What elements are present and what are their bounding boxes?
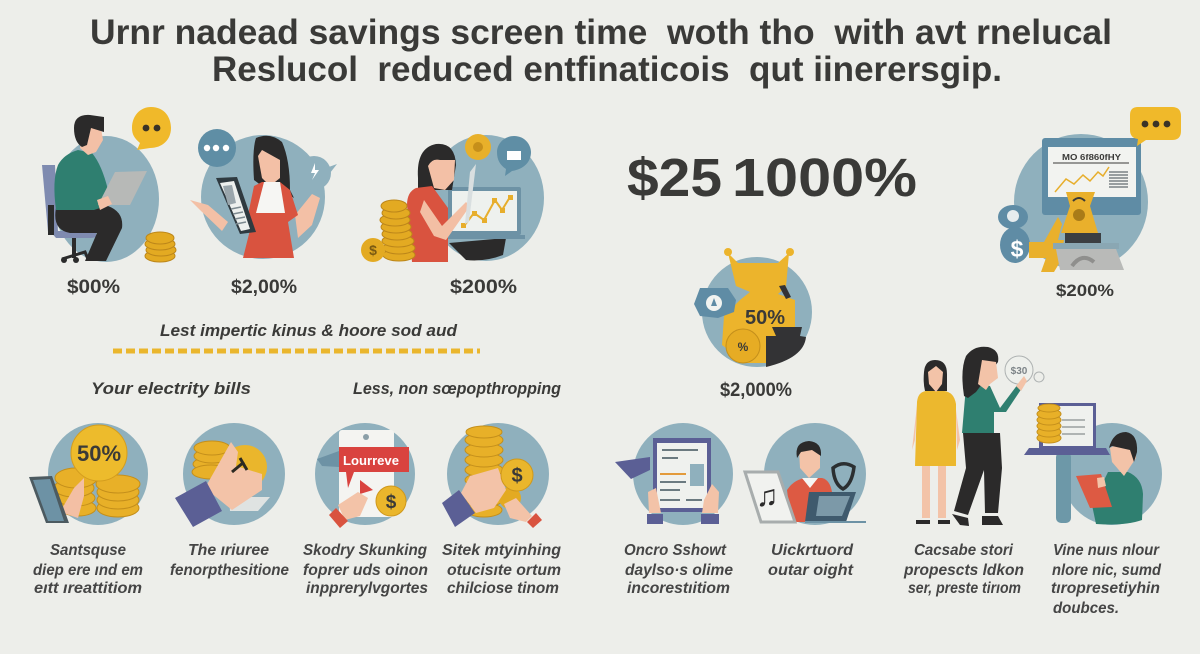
blue money bag: [998, 205, 1030, 263]
subheading with dashes: Lest impertic kinus & hoore sod aud: [160, 322, 458, 340]
caption: column 7: Cacsabe stori: [914, 542, 1014, 559]
caption: column 4: chilciose tinom: [447, 580, 559, 597]
caption: column 5: daylso·s olime: [625, 562, 733, 579]
info bubble: [694, 288, 736, 318]
coin: $: [369, 242, 377, 258]
yellow bag: [1061, 192, 1098, 233]
title: [90, 13, 1112, 89]
caption: column 7: propescts ldkon: [903, 562, 1024, 579]
headline figure: [627, 148, 917, 208]
caption: column 8: tıropresetiyhin: [1051, 580, 1160, 597]
caption: column 5: Oncro Sshowt: [624, 542, 727, 559]
label: second percentage: $2,00%: [231, 277, 297, 298]
music tablet: ♫: [756, 480, 778, 513]
shield: [833, 464, 854, 489]
caption: column 1: [33, 542, 143, 597]
dollar coin: $: [511, 465, 523, 487]
money circle: [1005, 356, 1044, 384]
blue bubble: [497, 136, 531, 176]
tablet: [216, 177, 256, 234]
caption: column 1: eıtt ıreattitiom: [34, 580, 142, 597]
caption: column 7: [903, 542, 1024, 597]
caption: column 8: [1051, 542, 1161, 617]
caption: column 4: [442, 542, 562, 597]
yellow speech bubble: [1130, 107, 1181, 146]
subheading: electricity: Your electrity bills: [91, 380, 251, 398]
icon: yellow bag with 50%: 50%: [745, 307, 785, 329]
caption: column 8: doubces.: [1053, 600, 1119, 617]
icon: woman with tablet: [190, 129, 337, 259]
caption: column 2: The ıriuree: [188, 542, 269, 559]
title: Urnr nadead savings screen time woth tho with avt rnelucal: [90, 13, 1112, 52]
speech bubble: yellow dots: [132, 107, 171, 150]
caption: column 6: outar oight: [768, 562, 854, 579]
label: bag amount: $2,000%: [720, 380, 792, 401]
caption: column 3: [303, 542, 428, 597]
caption: column 8: nlore nic, sumd: [1052, 562, 1161, 579]
figure: woman in teal with coin: [952, 347, 1044, 526]
red banner: Lourreve: [343, 453, 399, 468]
caption: column 1: diep ere ınd em: [33, 562, 143, 579]
coin: [361, 238, 385, 262]
coin stack: [1037, 404, 1061, 443]
caption: column 8: Vine nuıs nlour: [1053, 542, 1160, 559]
coin: %: [738, 340, 749, 354]
icon: coins 50%: [29, 423, 148, 525]
dollar coin: $: [386, 492, 397, 513]
caption: column 4: otucisıte ortum: [447, 562, 561, 579]
caption: column 3: inpprerylvgortes: [306, 580, 428, 597]
icon: phone with banner: [315, 423, 415, 528]
headline figure: 1000%: [732, 148, 917, 208]
label: first percentage: $00%: [67, 277, 120, 298]
coin stack: [380, 200, 415, 261]
label: monitor percentage: $200%: [1056, 281, 1114, 300]
caption: column 2: [170, 542, 289, 579]
icon: tablet with hands: [615, 423, 733, 525]
blue money bag: $: [1011, 236, 1024, 262]
icon: man on chair with laptop: [42, 107, 176, 263]
bubble: dots: [198, 129, 236, 167]
caption: column 5: [624, 542, 733, 597]
label: third percentage: $200%: [450, 277, 517, 298]
icon: monitor with money bag: [998, 107, 1181, 272]
bubble: bolt: [297, 156, 337, 190]
icon: woman with chart and coins: [361, 134, 544, 262]
title: Reslucol reduced entfinaticois qut iinerersgip.: [212, 50, 1002, 89]
monitor: MO 6f860fHY: [1062, 153, 1122, 162]
caption: column 2: fenorpthesitione: [170, 562, 289, 579]
monitor with chart: [448, 187, 525, 239]
caption: column 1: Santsquse: [50, 542, 126, 559]
caption: column 6: Uickrtuord: [771, 542, 854, 559]
figure: woman in yellow dress: [912, 360, 960, 524]
caption: column 3: Skodry Skunking: [303, 542, 428, 559]
caption: column 4: Sitek mtyinhing: [442, 542, 562, 559]
headline figure: $25: [627, 148, 722, 208]
icon: yellow bag with 50%: [694, 248, 812, 367]
caption: column 3: foprer uds oinon: [303, 562, 428, 579]
money circle: $30: [1011, 366, 1028, 377]
icon: person with music and laptop: [745, 423, 866, 525]
icon: coins 50%: 50%: [77, 441, 121, 466]
gray device: [1053, 243, 1124, 270]
icon: hand with coins: [175, 423, 285, 527]
icon: hands with coin stack: [442, 423, 549, 528]
caption: column 5: incorestıitiom: [627, 580, 730, 597]
caption: column 6: [768, 542, 854, 579]
icon: person at table with laptop: [1024, 403, 1162, 525]
subheading: shopping: Less, non sœpopthropping: [353, 380, 561, 398]
yellow hand: [1029, 217, 1064, 272]
caption: column 7: ser, preste tirıom: [908, 580, 1021, 597]
coin pile: [145, 232, 176, 262]
monitor: [1042, 138, 1141, 215]
yellow badge: [465, 134, 491, 160]
